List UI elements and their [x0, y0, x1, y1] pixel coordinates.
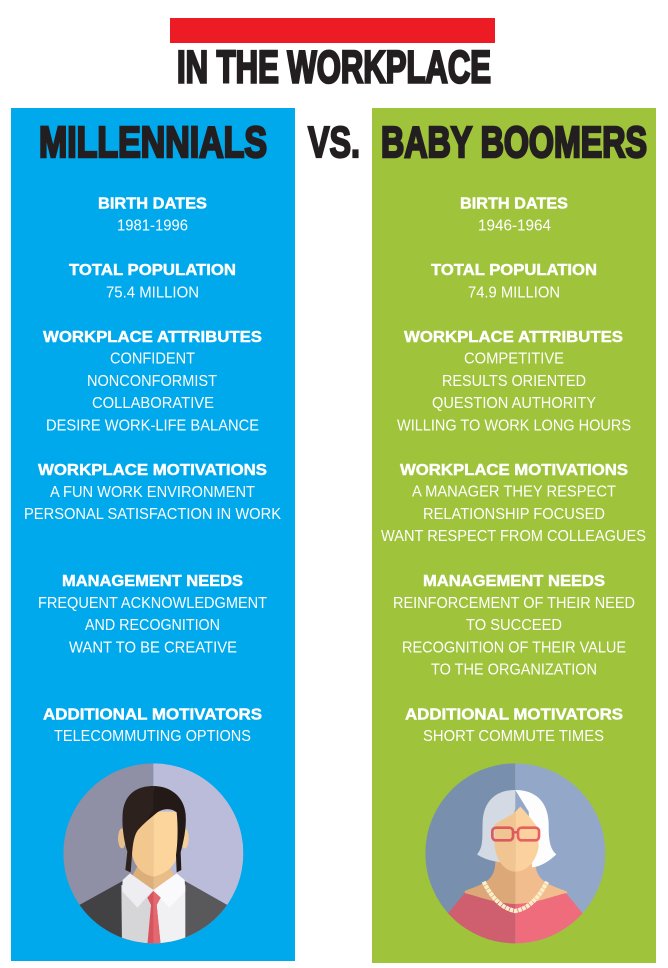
section: total population: 74.9 MILLION: [468, 284, 560, 302]
heading: millennials: MILLENNIALS: [39, 118, 267, 167]
section: management needs: RECOGNITION OF THEIR VALUE: [402, 640, 626, 656]
section: workplace motivations: A FUN WORK ENVIRONMENT: [50, 484, 255, 501]
icon: baby boomer woman avatar: [425, 763, 605, 945]
section: workplace motivations: RELATIONSHIP FOCUSED: [423, 506, 605, 523]
section: workplace attributes: [397, 329, 631, 434]
section: birth dates: BIRTH DATES: [460, 196, 568, 212]
section: management needs: WANT TO BE CREATIVE: [69, 640, 237, 656]
section: management needs: MANAGEMENT NEEDS: [423, 573, 605, 590]
section: workplace motivations: WANT RESPECT FROM COLLEAGUES: [381, 528, 646, 545]
section: management needs: REINFORCEMENT OF THEIR NEED: [393, 595, 635, 612]
section: management needs: TO SUCCEED: [466, 617, 562, 634]
section: management needs: [38, 573, 267, 656]
section: management needs: FREQUENT ACKNOWLEDGMENT: [38, 595, 267, 612]
section: workplace attributes: RESULTS ORIENTED: [442, 373, 586, 390]
section: workplace motivations: [24, 462, 281, 523]
section: management needs: AND RECOGNITION: [85, 617, 220, 634]
section: workplace attributes: COMPETITIVE: [464, 350, 564, 368]
section: additional motivators: ADDITIONAL MOTIVATORS: [43, 706, 262, 724]
vs label: VS.: [308, 118, 360, 167]
section: management needs: TO THE ORGANIZATION: [431, 662, 597, 678]
section: workplace attributes: DESIRE WORK-LIFE BALANCE: [46, 418, 259, 434]
section: birth dates: 1981-1996: [117, 218, 188, 234]
icon: millennial man avatar: [63, 763, 243, 945]
section: workplace motivations: WORKPLACE MOTIVATIONS: [38, 462, 267, 479]
section: additional motivators: ADDITIONAL MOTIVATORS: [405, 706, 623, 724]
section: birth dates: [98, 196, 207, 234]
section: additional motivators: [405, 706, 623, 745]
section: total population: TOTAL POPULATION: [431, 262, 597, 279]
section: birth dates: 1946-1964: [478, 218, 551, 234]
section: birth dates: [460, 196, 568, 234]
section: total population: [431, 262, 597, 302]
panel: baby boomers: [372, 108, 656, 963]
section: workplace attributes: QUESTION AUTHORITY: [432, 395, 596, 412]
section: workplace attributes: WORKPLACE ATTRIBUTES: [404, 329, 623, 346]
section: additional motivators: [43, 706, 262, 745]
section: workplace attributes: [43, 329, 262, 434]
title: IN THE WORKPLACE: [177, 42, 491, 92]
panel: millennials: [11, 108, 295, 961]
section: management needs: [393, 573, 635, 678]
section: workplace attributes: WORKPLACE ATTRIBUTES: [43, 329, 262, 346]
section: workplace motivations: [381, 462, 646, 545]
section: birth dates: BIRTH DATES: [98, 196, 207, 212]
section: additional motivators: TELECOMMUTING OPTIONS: [54, 728, 251, 745]
section: workplace attributes: COLLABORATIVE: [92, 395, 214, 412]
section: workplace attributes: WILLING TO WORK LONG HOURS: [397, 418, 631, 434]
section: management needs: MANAGEMENT NEEDS: [62, 573, 243, 590]
red title bar: [170, 18, 495, 43]
section: workplace attributes: CONFIDENT: [110, 350, 195, 368]
section: total population: [69, 262, 236, 302]
section: workplace motivations: WORKPLACE MOTIVATIONS: [400, 462, 628, 479]
section: total population: 75.4 MILLION: [106, 284, 199, 302]
section: additional motivators: SHORT COMMUTE TIMES: [423, 728, 604, 745]
section: workplace motivations: A MANAGER THEY RESPECT: [412, 484, 616, 500]
section: workplace attributes: NONCONFORMIST: [87, 373, 217, 390]
section: workplace motivations: PERSONAL SATISFACTION IN WORK: [24, 506, 281, 523]
section: total population: TOTAL POPULATION: [69, 262, 236, 279]
